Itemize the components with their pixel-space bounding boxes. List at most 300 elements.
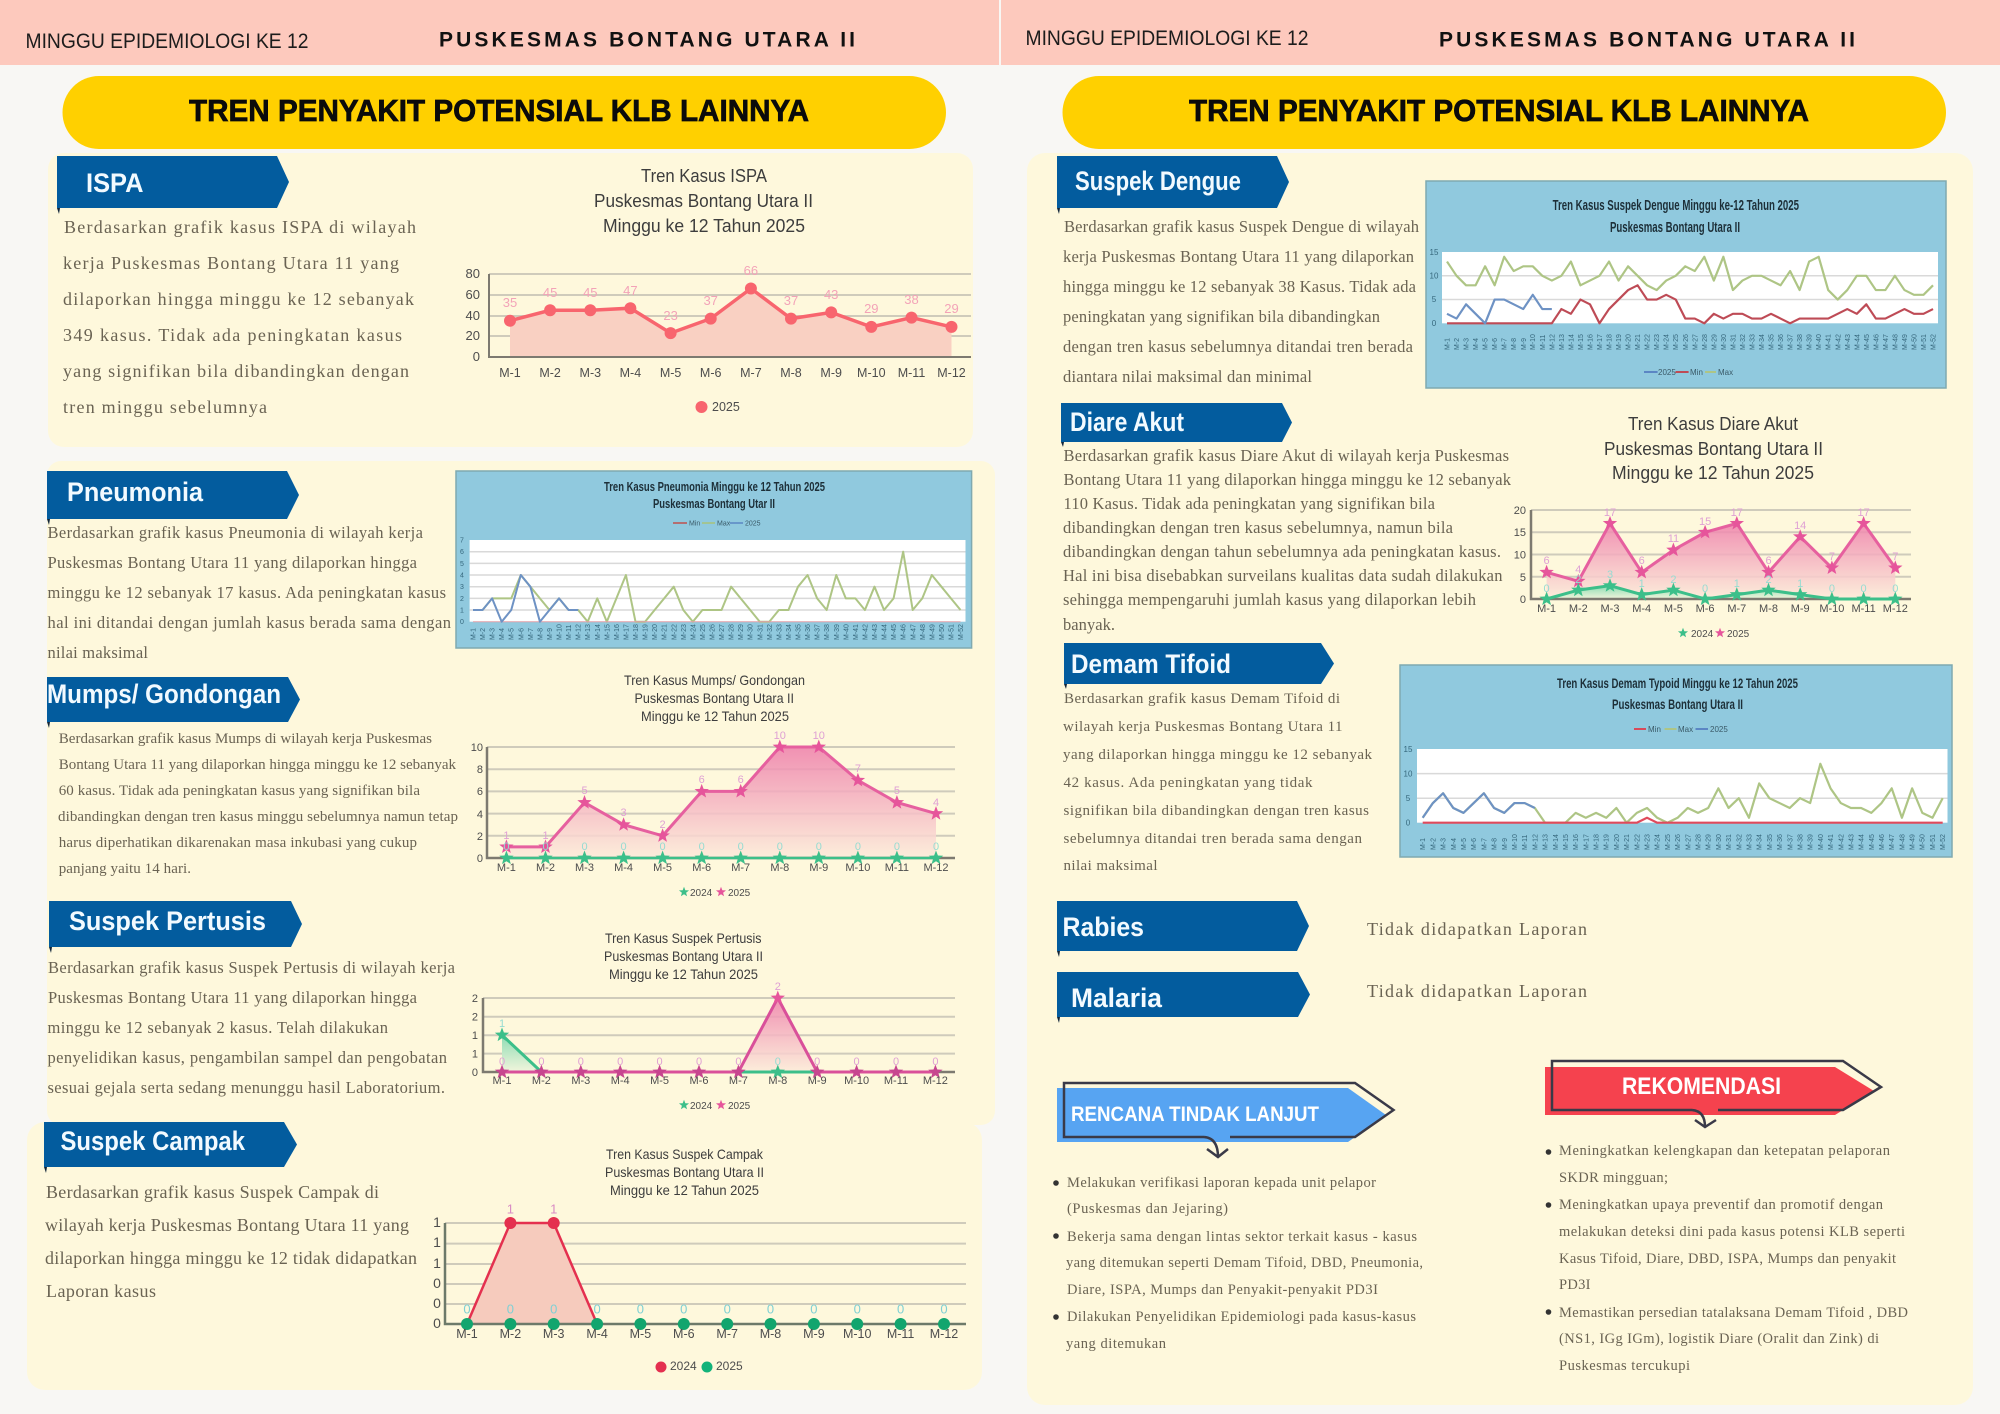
chart: Pneumonia weekly chart: M-41 [853, 624, 860, 640]
chart: Campak line chart: 1 [550, 1202, 557, 1216]
ribbon: Diare Akut [1061, 403, 1292, 447]
chart: Mumps line chart: M-6 [692, 862, 711, 874]
chart: Pneumonia weekly chart: M-21 [662, 624, 669, 640]
chart: Campak line chart: 1 [433, 1255, 441, 1271]
chart: ISPA line chart: Puskesmas Bontang Utara II [594, 191, 813, 211]
chart: Demam Tifoid weekly chart: M-42 [1836, 834, 1845, 850]
chart: Suspek Dengue weekly chart: M-13 [1559, 334, 1566, 350]
chart: Demam Tifoid weekly chart: M-49 [1907, 834, 1917, 850]
text: ISPA description: 349 kasus. Tidak ada peningkatan kasus [63, 325, 402, 345]
banner: Rekomendasi: REKOMENDASI [1622, 1073, 1781, 1100]
chart: Diare Akut line chart: M-11 [1851, 603, 1876, 615]
chart: ISPA line chart: 66 [744, 263, 758, 278]
chart: Pneumonia weekly chart: M-36 [805, 624, 812, 640]
chart: Diare Akut line chart: 7 [1892, 551, 1898, 563]
chart: Diare Akut line chart: 15 [1514, 527, 1526, 539]
chart: Pneumonia weekly chart: M-18 [633, 624, 640, 640]
chart: Campak line chart: M-5 [630, 1327, 651, 1341]
chart: Diare Akut line chart: 2024 [1691, 629, 1714, 640]
chart: Pneumonia weekly chart: M-29 [738, 624, 745, 640]
chart: Demam Tifoid weekly chart: M-34 [1754, 834, 1764, 850]
ribbon: Suspek Pertusis: Suspek Pertusis [69, 906, 266, 936]
banner: Rencana Tindak Lanjut: RENCANA TINDAK LANJUT [1071, 1103, 1319, 1126]
right header bar: PUSKESMAS BONTANG UTARA II [1439, 28, 1855, 52]
text: Campak description: Berdasarkan grafik kasus Suspek Campak di [46, 1182, 379, 1202]
chart: Pertusis line chart: 0 [814, 1056, 820, 1068]
chart: Demam Tifoid weekly chart: M-31 [1724, 834, 1733, 850]
chart: Pneumonia weekly chart: M-15 [604, 624, 611, 640]
chart: Pertusis line chart [472, 930, 955, 1112]
chart: Mumps line chart: 0 [777, 841, 783, 853]
chart: Mumps line chart: 6 [699, 774, 705, 786]
chart: Diare Akut line chart: 10 [1514, 550, 1526, 562]
ribbon: Suspek Campak [44, 1122, 297, 1173]
panel: ISPA background [48, 153, 973, 447]
ribbon: Demam Tifoid: Demam Tifoid [1071, 649, 1231, 679]
chart: Campak line chart: 0 [940, 1302, 948, 1316]
text: Campak description: wilayah kerja Puskesmas Bontang Utara 11 yang [45, 1215, 409, 1235]
chart: Diare Akut line chart: M-6 [1696, 603, 1715, 615]
text: Mumps description: Bontang Utara 11 yang dilaporkan hingga minggu ke 12 sebanyak [59, 757, 456, 773]
text: Rencana Tindak Lanjut list: Diare, ISPA, Mumps dan Penyakit-penyakit PD3I [1067, 1282, 1378, 1298]
chart: Pneumonia weekly chart: M-38 [824, 624, 831, 640]
chart: Suspek Dengue weekly chart: M-19 [1616, 334, 1623, 350]
chart: Campak line chart: M-12 [930, 1327, 958, 1341]
chart: Diare Akut line chart: 2 [1765, 574, 1772, 586]
chart: Mumps line chart: 6 [477, 786, 483, 798]
chart: Campak line chart: M-6 [673, 1327, 695, 1341]
chart: Mumps line chart: 10 [813, 730, 825, 742]
chart: Demam Tifoid weekly chart: M-36 [1775, 834, 1784, 850]
chart: Pneumonia weekly chart: M-9 [547, 628, 554, 640]
text: Rekomendasi list: Meningkatkan upaya preventif dan promotif dengan [1559, 1197, 1884, 1213]
chart: Mumps line chart: 7 [855, 763, 861, 775]
chart: Pertusis line chart: M-5 [650, 1075, 669, 1087]
chart: Demam Tifoid weekly chart: M-33 [1744, 834, 1754, 850]
ribbon: Pneumonia: Pneumonia [67, 477, 204, 507]
chart: Diare Akut line chart: 0 [1892, 583, 1898, 595]
chart: Mumps line chart: 1 [542, 830, 549, 842]
chart: Mumps line chart: 4 [933, 797, 939, 809]
chart: Demam Tifoid weekly chart: M-25 [1663, 834, 1672, 850]
panel: Pneumonia to Pertusis background [47, 461, 995, 1125]
text: Tifoid description: wilayah kerja Puskesmas Bontang Utara 11 [1063, 719, 1342, 735]
chart: Pneumonia weekly chart [456, 471, 972, 648]
chart: Campak line chart: 1 [507, 1202, 514, 1216]
chart: Pertusis line chart: 0 [735, 1056, 741, 1068]
chart: Demam Tifoid weekly chart: M-43 [1846, 834, 1855, 850]
chart: Suspek Dengue weekly chart: M-24 [1664, 334, 1671, 350]
chart: Pneumonia weekly chart: M-2 [480, 628, 487, 640]
chart: ISPA line chart: 35 [503, 295, 517, 310]
chart: Campak line chart: 0 [463, 1302, 471, 1316]
text: Pertusis description: minggu ke 12 sebanyak 2 kasus. Telah dilakukan [48, 1018, 388, 1037]
text: Diare description: 110 Kasus. Tidak ada peningkatan yang signifikan bila [1064, 494, 1436, 513]
chart: Pneumonia weekly chart: M-37 [815, 624, 822, 640]
text: Pertusis description: penyelidikan kasus, pengambilan sampel dan pengobatan [48, 1048, 447, 1067]
chart: ISPA line chart: 37 [784, 293, 798, 308]
ribbon: Malaria: Malaria [1071, 983, 1163, 1013]
chart: Pertusis line chart: 1 [472, 1048, 478, 1060]
chart: Demam Tifoid weekly chart: M-50 [1918, 834, 1927, 850]
chart: Pertusis line chart: 0 [538, 1056, 544, 1068]
chart: Campak line chart: M-11 [887, 1327, 914, 1341]
chart: Diare Akut line chart: 5 [1520, 572, 1526, 584]
chart: Pertusis line chart: 2024 [690, 1101, 713, 1112]
text: Tifoid description: yang dilaporkan hingga minggu ke 12 sebanyak [1063, 747, 1372, 763]
chart: Pneumonia weekly chart: M-43 [872, 624, 879, 640]
text: Malaria status: Tidak didapatkan Laporan [1367, 981, 1587, 1001]
chart: Suspek Dengue weekly chart: M-40 [1816, 334, 1823, 350]
chart: ISPA line chart: 29 [864, 301, 879, 316]
chart: Pneumonia weekly chart: M-6 [518, 628, 525, 640]
chart: Diare Akut line chart: 0 [1520, 594, 1526, 606]
ribbon: Suspek Campak: Suspek Campak [60, 1126, 246, 1156]
chart: Pneumonia weekly chart: M-31 [757, 624, 764, 640]
text: Dengue description: dengan tren kasus sebelumnya ditandai tren berada [1063, 337, 1414, 356]
chart: Pertusis line chart: M-8 [768, 1075, 787, 1087]
chart: Diare Akut line chart: M-7 [1727, 603, 1746, 615]
chart: Demam Tifoid weekly chart: Puskesmas Bontang Utara II [1612, 696, 1743, 712]
chart: Pertusis line chart: 2 [775, 981, 781, 993]
text: Rencana Tindak Lanjut list: Melakukan verifikasi laporan kepada unit pelapor [1067, 1175, 1376, 1191]
chart: Diare Akut line chart: 1 [1734, 578, 1740, 590]
chart: Pneumonia weekly chart: M-25 [700, 624, 707, 640]
chart: Suspek Dengue weekly chart: M-38 [1797, 334, 1804, 350]
text: Dengue description: diantara nilai maksimal dan minimal [1063, 367, 1312, 386]
chart: ISPA line chart: Minggu ke 12 Tahun 2025 [603, 216, 805, 236]
chart: Suspek Dengue weekly chart: M-20 [1626, 334, 1633, 350]
chart: Demam Tifoid weekly chart: Tren Kasus Demam Typoid Minggu ke 12 Tahun 2025 [1557, 675, 1798, 691]
chart: Mumps line chart: 10 [774, 730, 786, 742]
chart: Suspek Dengue weekly chart: M-3 [1464, 338, 1471, 350]
chart: Diare Akut line chart: 20 [1514, 505, 1526, 517]
chart: Diare Akut line chart: 6 [1639, 555, 1645, 567]
text: ISPA description [63, 217, 416, 417]
chart: Pneumonia weekly chart: M-14 [595, 624, 602, 640]
chart: Suspek Dengue weekly chart: M-18 [1607, 334, 1614, 350]
chart: Mumps line chart: 5 [581, 785, 588, 797]
chart: Pertusis line chart: 0 [617, 1056, 623, 1068]
text: Dengue description: peningkatan yang signifikan bila dibandingkan [1063, 307, 1380, 326]
chart: Diare Akut line chart: M-5 [1664, 603, 1683, 615]
chart: Diare Akut line chart: 15 [1699, 516, 1711, 528]
chart: Pertusis line chart: Puskesmas Bontang Utara II [604, 948, 763, 964]
text: ISPA description: Berdasarkan grafik kasus ISPA di wilayah [64, 217, 416, 237]
chart: Suspek Dengue weekly chart: M-10 [1530, 334, 1537, 350]
right header bar [1001, 0, 2000, 65]
chart: Campak line chart: 1 [433, 1234, 441, 1250]
text: Pertusis description: Berdasarkan grafik kasus Suspek Pertusis di wilayah kerja [48, 958, 456, 977]
chart: Demam Tifoid weekly chart: M-47 [1887, 834, 1896, 850]
chart: Pneumonia weekly chart: M-50 [939, 624, 946, 640]
ribbon: ISPA: ISPA [86, 168, 144, 198]
chart: Diare Akut line chart: 1 [1639, 578, 1645, 590]
chart: Pertusis line chart: M-1 [493, 1075, 511, 1087]
chart: Suspek Dengue weekly chart: M-47 [1883, 334, 1890, 350]
chart: Pneumonia weekly chart: M-51 [948, 624, 956, 640]
chart: Pneumonia weekly chart: M-10 [556, 624, 564, 640]
chart: Mumps line chart: 0 [816, 841, 822, 853]
chart: Campak line chart: 0 [433, 1275, 441, 1291]
text: ISPA description: dilaporkan hingga minggu ke 12 sebanyak [63, 289, 414, 309]
chart: Mumps line chart: 0 [542, 841, 549, 853]
chart: ISPA line chart: 20 [466, 328, 480, 343]
ribbon: Pneumonia [47, 471, 299, 525]
text: Rekomendasi list: SKDR mingguan; [1559, 1170, 1668, 1186]
text: Diare description: banyak. [1063, 615, 1115, 634]
text: Tifoid description: nilai maksimal [1064, 858, 1158, 874]
chart: Suspek Dengue weekly chart: M-22 [1645, 334, 1652, 350]
text: Pneumonia description: Puskesmas Bontang Utara 11 yang dilaporkan hingga [48, 553, 418, 572]
chart: ISPA line chart: M-3 [580, 366, 601, 380]
chart: Mumps line chart: 0 [699, 841, 705, 853]
chart: Suspek Dengue weekly chart: Min [1690, 368, 1703, 377]
text: Pneumonia description: Berdasarkan grafik kasus Pneumonia di wilayah kerja [48, 523, 424, 542]
text: Rencana Tindak Lanjut list [1053, 1175, 1423, 1352]
chart: Pneumonia weekly chart: 5 [460, 561, 464, 568]
ribbon: Diare Akut: Diare Akut [1070, 407, 1184, 437]
chart: Campak line chart: 0 [897, 1302, 904, 1316]
chart: Pneumonia weekly chart: M-3 [490, 628, 497, 640]
text: Mumps description: dibandingkan dengan tren kasus minggu sebelumnya namun tetap [58, 809, 458, 825]
chart: Pneumonia weekly chart: M-13 [585, 624, 592, 640]
chart: Demam Tifoid weekly chart: M-32 [1734, 834, 1743, 850]
chart: Suspek Dengue weekly chart: M-29 [1711, 334, 1718, 350]
chart: Mumps line chart: M-9 [809, 862, 828, 874]
text: Tifoid description: 42 kasus. Ada peningkatan yang tidak [1064, 775, 1313, 791]
chart: Suspek Dengue weekly chart: M-39 [1807, 334, 1814, 350]
chart: ISPA line chart: 45 [583, 285, 598, 300]
left header bar: MINGGU EPIDEMIOLOGI KE 12 [26, 30, 308, 53]
banner: Rencana Tindak Lanjut [1057, 1083, 1394, 1157]
chart: Pertusis line chart: 0 [657, 1056, 663, 1068]
chart: Campak line chart: M-9 [803, 1327, 825, 1341]
chart: Mumps line chart: 0 [660, 841, 666, 853]
text: Pneumonia description [48, 523, 451, 662]
chart: Campak line chart: 2024 [670, 1359, 697, 1373]
chart: Pneumonia weekly chart: M-42 [862, 624, 870, 640]
chart: ISPA line chart: 45 [543, 285, 557, 300]
chart: ISPA line chart: 40 [466, 308, 480, 323]
chart: Mumps line chart: Tren Kasus Mumps/ Gondongan [624, 672, 805, 688]
chart: Suspek Dengue weekly chart: Puskesmas Bontang Utara II [1610, 219, 1740, 236]
text: Diare description: dibandingkan dengan tren kasus sebelumnya, namun bila [1063, 518, 1454, 537]
chart: Campak line chart: 0 [724, 1302, 731, 1316]
banner: Rekomendasi [1545, 1061, 1881, 1127]
chart: Diare Akut line chart: M-2 [1569, 603, 1588, 615]
chart: Suspek Dengue weekly chart: M-8 [1511, 338, 1518, 350]
chart: Mumps line chart: M-12 [923, 862, 949, 874]
text: Mumps description: panjang yaitu 14 hari. [59, 861, 191, 877]
chart: Pertusis line chart: 0 [932, 1056, 938, 1068]
chart: Campak line chart: M-8 [760, 1327, 781, 1341]
chart: Demam Tifoid weekly chart: M-41 [1826, 834, 1835, 850]
chart: Demam Tifoid weekly chart [1400, 665, 1952, 857]
chart: Mumps line chart: 0 [503, 841, 509, 853]
chart: Demam Tifoid weekly chart: M-17 [1581, 834, 1590, 850]
chart: Mumps line chart: M-8 [770, 862, 789, 874]
chart: Mumps line chart: 2 [660, 819, 666, 831]
chart: Suspek Dengue weekly chart: M-30 [1721, 334, 1728, 350]
text: Tifoid description: signifikan bila dibandingkan dengan tren kasus [1064, 803, 1369, 819]
chart: Pertusis line chart: 1 [472, 1030, 478, 1042]
chart: Demam Tifoid weekly chart: M-9 [1500, 838, 1509, 850]
chart: Pneumonia weekly chart: M-5 [509, 628, 516, 640]
chart: Campak line chart: 0 [767, 1302, 774, 1316]
chart: Suspek Dengue weekly chart: M-27 [1692, 334, 1699, 350]
chart: Campak line chart: Tren Kasus Suspek Campak [606, 1146, 764, 1162]
ribbon: Suspek Dengue: Suspek Dengue [1075, 166, 1241, 196]
chart: Campak line chart: 0 [550, 1302, 557, 1316]
chart: Pneumonia weekly chart: M-49 [929, 624, 936, 640]
left header bar [0, 0, 999, 65]
text: Dengue description: Berdasarkan grafik kasus Suspek Dengue di wilayah [1064, 217, 1420, 236]
text: Diare description: Bontang Utara 11 yang dilaporkan hingga minggu ke 12 sebanyak [1064, 470, 1512, 489]
chart: Pneumonia weekly chart: M-30 [748, 624, 755, 640]
chart: Demam Tifoid weekly chart: M-14 [1551, 834, 1560, 850]
text: Rencana Tindak Lanjut list: Dilakukan Penyelidikan Epidemiologi pada kasus-kasus [1067, 1309, 1416, 1325]
chart: Pneumonia weekly chart: M-40 [843, 624, 850, 640]
chart: Pertusis line chart: M-9 [808, 1075, 827, 1087]
chart: Suspek Dengue weekly chart: M-1 [1445, 338, 1451, 350]
chart: Diare Akut line chart: Puskesmas Bontang Utara II [1604, 439, 1823, 459]
chart: Campak line chart: M-4 [586, 1327, 608, 1341]
chart: Suspek Dengue weekly chart: M-14 [1568, 334, 1575, 350]
chart: Pneumonia weekly chart: M-7 [528, 628, 535, 640]
chart: Mumps line chart: M-1 [497, 862, 516, 874]
ribbon: Malaria [1057, 972, 1310, 1023]
chart: Pertusis line chart: M-4 [611, 1075, 630, 1087]
chart: Diare Akut line chart: 4 [1575, 564, 1581, 576]
chart: Suspek Dengue weekly chart: M-45 [1864, 334, 1871, 350]
chart: ISPA line chart: M-4 [620, 366, 641, 380]
chart: Suspek Dengue weekly chart: M-52 [1931, 334, 1938, 350]
chart: Campak line chart: 0 [680, 1302, 687, 1316]
chart: ISPA line chart: M-10 [857, 366, 886, 380]
chart: Campak line chart: 0 [854, 1302, 861, 1316]
text: Rencana Tindak Lanjut list: yang ditemukan [1066, 1336, 1167, 1352]
chart: Demam Tifoid weekly chart: M-16 [1571, 834, 1580, 850]
chart: Pneumonia weekly chart: M-34 [786, 624, 793, 640]
panel: Campak background [27, 1122, 982, 1390]
text: Rekomendasi list: Puskesmas tercukupi [1559, 1358, 1690, 1374]
chart: Pneumonia weekly chart: M-52 [958, 624, 965, 640]
chart: Demam Tifoid weekly chart: 5 [1406, 794, 1411, 803]
chart: Suspek Dengue weekly chart: M-6 [1492, 338, 1499, 350]
chart: Campak line chart: 0 [810, 1302, 818, 1316]
chart: Campak line chart: M-10 [843, 1327, 871, 1341]
chart: Mumps line chart: 5 [894, 785, 900, 797]
chart: Suspek Dengue weekly chart: M-5 [1483, 338, 1490, 350]
chart: ISPA line chart: Tren Kasus ISPA [641, 166, 767, 186]
chart: Campak line chart: 0 [433, 1315, 441, 1331]
text: Mumps description: 60 kasus. Tidak ada peningkatan kasus yang signifikan bila [59, 783, 420, 799]
chart: Diare Akut line chart: 2025 [1727, 629, 1750, 640]
chart: Demam Tifoid weekly chart: Min [1648, 725, 1661, 734]
chart: Mumps line chart: 4 [477, 809, 483, 821]
chart: Suspek Dengue weekly chart: M-36 [1778, 334, 1785, 350]
chart: Demam Tifoid weekly chart: M-11 [1520, 835, 1529, 850]
chart: Mumps line chart [471, 672, 955, 899]
chart: Pertusis line chart: 0 [775, 1056, 781, 1068]
chart: Pneumonia weekly chart: M-32 [767, 624, 774, 640]
chart: Mumps line chart: 1 [503, 830, 509, 842]
chart: Pneumonia weekly chart: 0 [460, 619, 464, 626]
chart: Pneumonia weekly chart: M-33 [776, 624, 783, 640]
chart: Campak line chart: 2025 [716, 1359, 743, 1373]
chart: Demam Tifoid weekly chart: 10 [1404, 770, 1413, 778]
chart: Demam Tifoid weekly chart: 0 [1406, 818, 1411, 828]
chart: Demam Tifoid weekly chart: M-22 [1632, 834, 1641, 850]
chart: Demam Tifoid weekly chart: M-24 [1653, 834, 1662, 850]
chart: Demam Tifoid weekly chart: M-30 [1714, 834, 1723, 850]
chart: Suspek Dengue weekly chart: M-17 [1597, 334, 1604, 350]
chart: Campak line chart: Puskesmas Bontang Utara II [605, 1164, 764, 1180]
chart: Demam Tifoid weekly chart: M-13 [1540, 834, 1550, 850]
chart: Pertusis line chart: M-10 [844, 1075, 869, 1087]
chart: Suspek Dengue weekly chart: M-26 [1683, 334, 1690, 350]
chart: Diare Akut line chart: 2 [1670, 574, 1676, 586]
text: Pneumonia description: nilai maksimal [48, 643, 148, 662]
chart: Diare Akut line chart: 3 [1607, 569, 1613, 581]
chart: Diare Akut line chart: M-1 [1537, 603, 1556, 615]
chart: ISPA line chart: M-6 [700, 366, 722, 380]
chart: Diare Akut line chart: 2 [1575, 574, 1581, 586]
panel: right page background [1027, 153, 1973, 1405]
chart: Pneumonia weekly chart: M-22 [671, 624, 678, 640]
chart: Pertusis line chart: 2 [472, 1012, 478, 1024]
chart: Suspek Dengue weekly chart: 0 [1432, 319, 1437, 328]
chart: Mumps line chart: Puskesmas Bontang Utara II [634, 690, 794, 706]
chart: Suspek Dengue weekly chart: Max [1718, 368, 1733, 377]
text: Diare description: sehingga mempengaruhi jumlah kasus yang dilaporkan lebih [1063, 590, 1477, 609]
chart: Demam Tifoid weekly chart: M-40 [1816, 834, 1825, 850]
chart: Suspek Dengue weekly chart: M-2 [1454, 338, 1461, 350]
chart: ISPA line chart: 43 [824, 287, 838, 302]
chart: Pertusis line chart: M-2 [532, 1075, 551, 1087]
chart: Demam Tifoid weekly chart: M-27 [1683, 834, 1692, 850]
text: Campak description: Laporan kasus [46, 1281, 156, 1301]
chart: Demam Tifoid weekly chart: M-45 [1867, 834, 1876, 850]
chart: ISPA line chart: 60 [466, 287, 480, 302]
chart: Mumps line chart: 2 [477, 831, 483, 843]
chart: Pertusis line chart: 2025 [728, 1101, 751, 1112]
ribbon: ISPA [57, 156, 289, 214]
chart: Demam Tifoid weekly chart: M-23 [1642, 834, 1652, 850]
text: ISPA description: tren minggu sebelumnya [63, 397, 267, 417]
chart: Diare Akut line chart: 14 [1794, 520, 1806, 532]
text: Tifoid description [1063, 691, 1372, 874]
chart: Demam Tifoid weekly chart: M-21 [1622, 834, 1631, 850]
chart: Campak line chart: M-2 [500, 1327, 521, 1341]
text: Diare description: dibandingkan dengan tahun sebelumnya ada peningkatan kasus. [1063, 542, 1501, 561]
chart: Mumps line chart: M-3 [575, 862, 594, 874]
chart: Suspek Dengue weekly chart: M-44 [1854, 334, 1861, 350]
chart: Campak line chart: M-3 [543, 1327, 565, 1341]
chart: Pneumonia weekly chart: M-23 [681, 624, 688, 640]
chart: Demam Tifoid weekly chart: M-4 [1449, 838, 1458, 850]
chart: Diare Akut line chart: 0 [1544, 583, 1550, 595]
chart: ISPA line chart [466, 166, 971, 414]
text: Tifoid description: Berdasarkan grafik kasus Demam Tifoid di [1064, 691, 1340, 707]
text: Rekomendasi list: melakukan deteksi dini pada kasus potensi KLB seperti [1559, 1224, 1905, 1240]
chart: Demam Tifoid weekly chart: M-48 [1897, 834, 1906, 850]
chart: Mumps line chart: 2024 [690, 888, 713, 899]
chart: Demam Tifoid weekly chart: M-28 [1693, 834, 1703, 850]
text: Mumps description [58, 731, 458, 877]
text: Dengue description: kerja Puskesmas Bontang Utara 11 yang dilaporkan [1063, 247, 1414, 266]
